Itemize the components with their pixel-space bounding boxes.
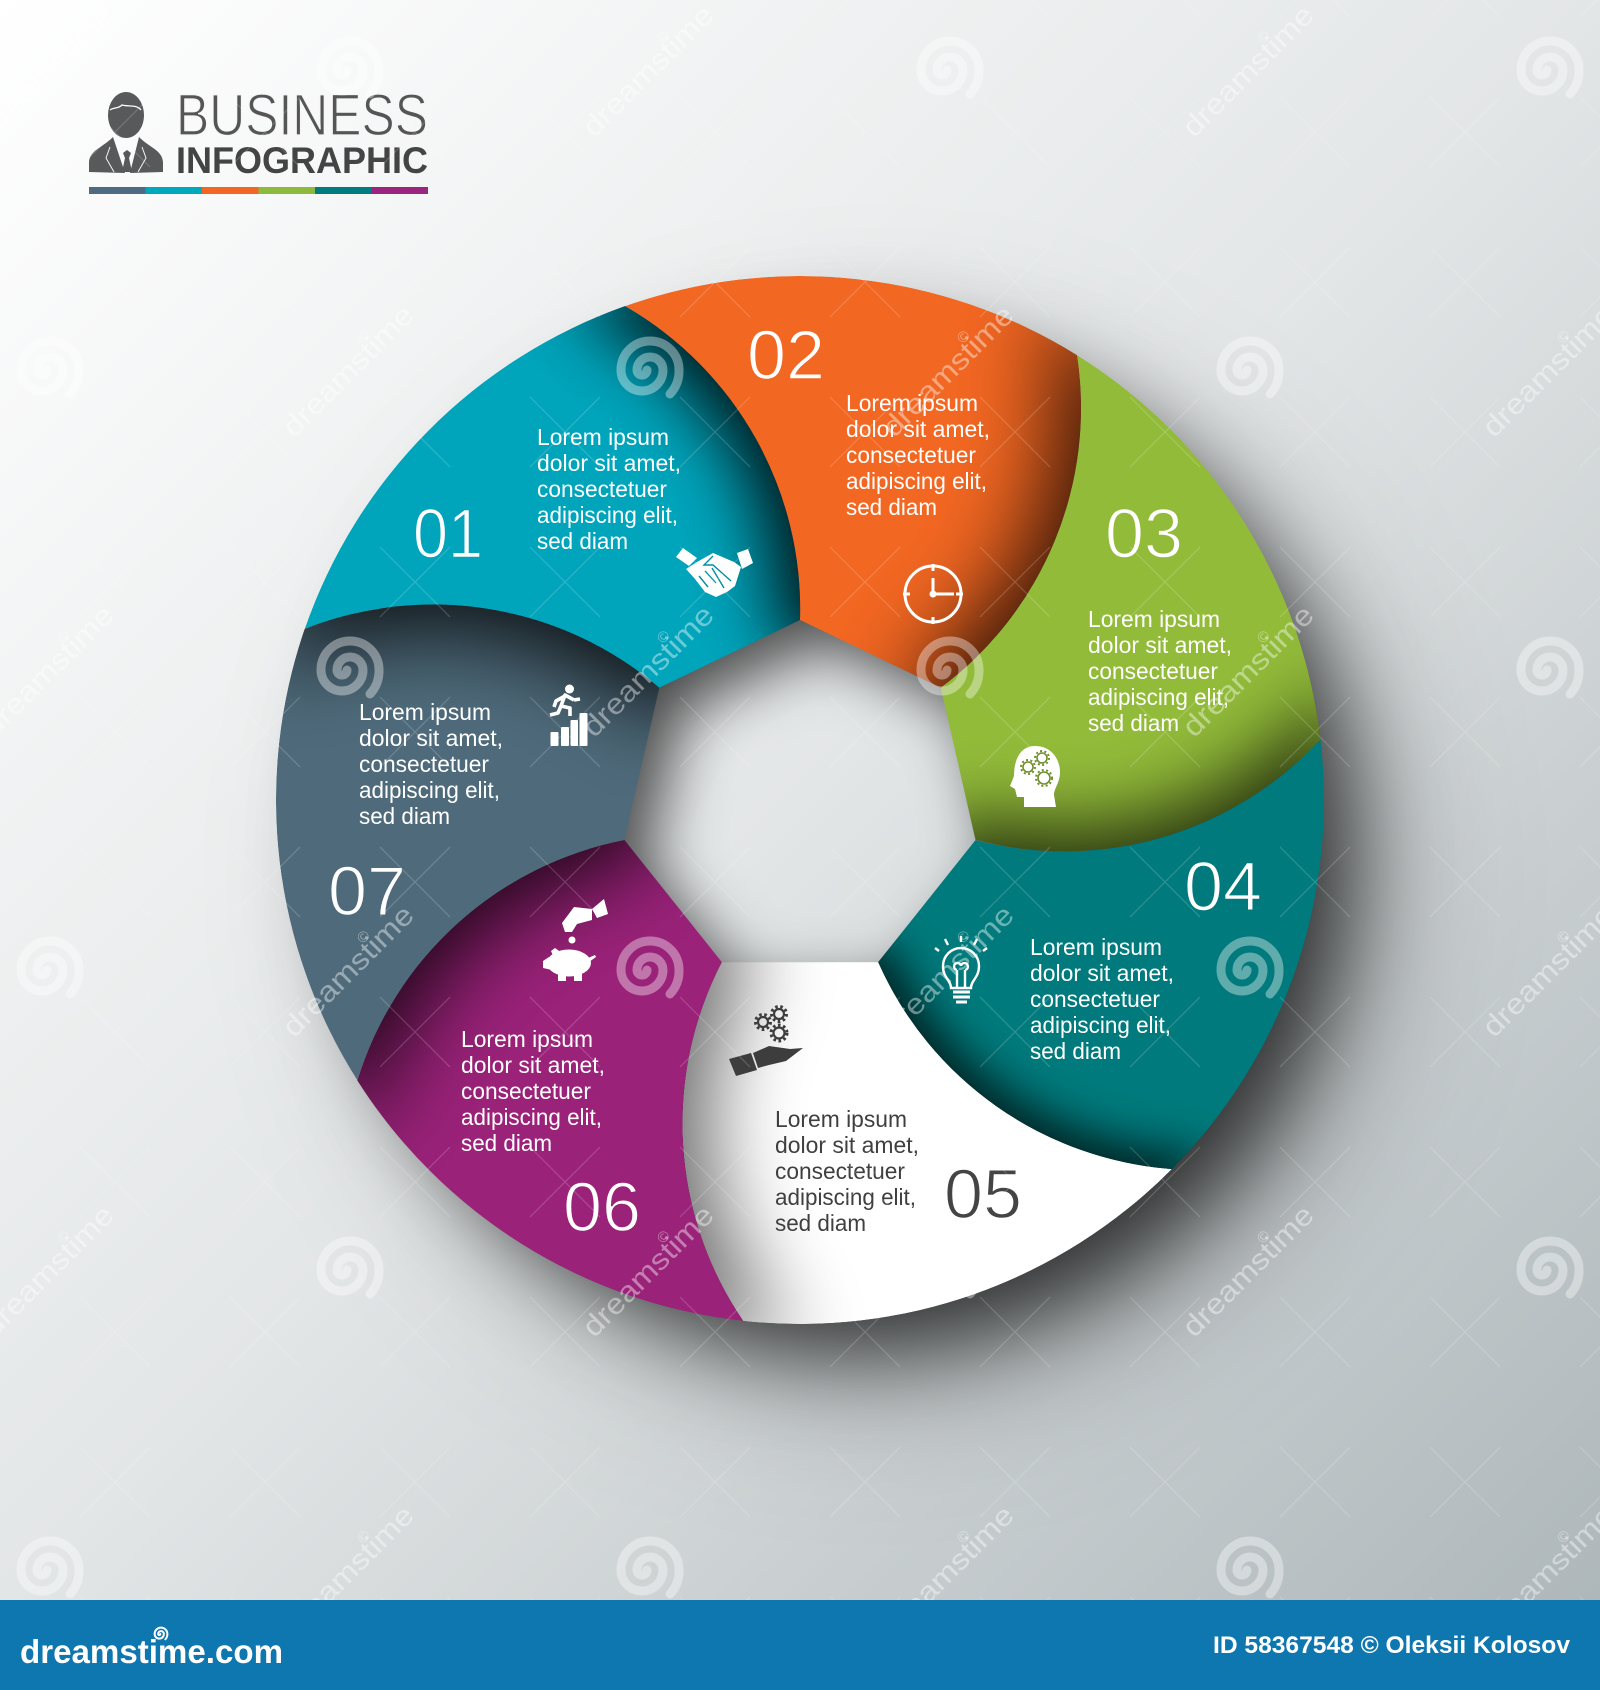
- watermark text: dreamstime: [276, 899, 421, 1044]
- watermark text: ©: [654, 1227, 674, 1247]
- watermark text: dreamstime: [1176, 599, 1321, 744]
- text block 04: sed diam: [1030, 1038, 1121, 1064]
- text block 05: sed diam: [775, 1210, 866, 1236]
- watermark text: ©: [54, 1227, 74, 1247]
- watermark text: dreamstime: [276, 299, 421, 444]
- watermark text: ©: [654, 27, 674, 47]
- text block 07: [359, 699, 503, 829]
- watermark text: ©: [954, 1527, 974, 1547]
- text block 02: dolor sit amet,: [846, 416, 990, 442]
- text block 05: adipiscing elit,: [775, 1184, 916, 1210]
- number 03: 03: [1105, 494, 1183, 572]
- icon: head with gears: [1010, 746, 1060, 807]
- icon: light bulb: [935, 936, 987, 1002]
- segment 01 shape: [305, 306, 800, 688]
- colour bar: [89, 187, 428, 194]
- watermark text: ©: [1554, 327, 1574, 347]
- watermark text: ©: [1554, 1527, 1574, 1547]
- text block 04: consectetuer: [1030, 986, 1160, 1012]
- watermark text: ©: [1554, 927, 1574, 947]
- text block 01: [537, 424, 681, 554]
- segment 03 shape: [941, 356, 1320, 852]
- watermark text: ©: [54, 27, 74, 47]
- text block 04: Lorem ipsum: [1030, 934, 1162, 960]
- watermark text: dreamstime: [876, 299, 1021, 444]
- watermark text: ©: [54, 627, 74, 647]
- watermark text: dreamstime: [276, 1499, 421, 1644]
- watermark text: ©: [1254, 27, 1274, 47]
- text block 05: consectetuer: [775, 1158, 905, 1184]
- footer logo spiral: [155, 1628, 167, 1639]
- watermark text: dreamstime: [576, 1199, 721, 1344]
- number 01: 01: [413, 494, 483, 572]
- text block 03: dolor sit amet,: [1088, 632, 1232, 658]
- icon: clock: [903, 564, 963, 624]
- watermark text: dreamstime: [876, 899, 1021, 1044]
- text block 02: consectetuer: [846, 442, 976, 468]
- text block 07: Lorem ipsum: [359, 699, 491, 725]
- watermark text: dreamstime: [576, 0, 721, 144]
- text block 05: dolor sit amet,: [775, 1132, 919, 1158]
- watermark text: ©: [354, 1527, 374, 1547]
- text block 03: consectetuer: [1088, 658, 1218, 684]
- text block 06: consectetuer: [461, 1078, 591, 1104]
- text block 06: adipiscing elit,: [461, 1104, 602, 1130]
- heading: infographic: INFOGRAPHIC: [176, 140, 428, 181]
- panel: segment 03: [941, 356, 1320, 852]
- text block 01: sed diam: [537, 528, 628, 554]
- number 04: 04: [1184, 848, 1262, 926]
- icon: handshake: [676, 548, 753, 597]
- watermark text: ©: [354, 927, 374, 947]
- footer logo text: dreamstime.com: [20, 1633, 283, 1670]
- text block 03: sed diam: [1088, 710, 1179, 736]
- text block 01: Lorem ipsum: [537, 424, 669, 450]
- text block 05: [775, 1106, 919, 1236]
- segment 07 shape: [0, 65, 986, 1144]
- logo: business infographic: [89, 83, 428, 194]
- text block 02: adipiscing elit,: [846, 468, 987, 494]
- number 05: 05: [944, 1155, 1022, 1233]
- text block 06: Lorem ipsum: [461, 1026, 593, 1052]
- footer banner: [0, 1600, 1600, 1690]
- footer credit: ID 58367548 © Oleksii Kolosov: [1213, 1632, 1571, 1659]
- watermark text: dreamstime: [1176, 1199, 1321, 1344]
- icon: hand with gears: [729, 1006, 803, 1076]
- segment 06 shape: [357, 840, 743, 1321]
- watermark text: ©: [1254, 627, 1274, 647]
- icon: runner on bars: [550, 684, 588, 746]
- text block 03: [1088, 606, 1232, 736]
- text block 07: consectetuer: [359, 751, 489, 777]
- segment 05 shape: [682, 962, 1172, 1324]
- number 07: 07: [328, 852, 406, 930]
- icon: hand and piggy bank: [543, 899, 608, 981]
- text block 07: dolor sit amet,: [359, 725, 503, 751]
- text block 01: consectetuer: [537, 476, 667, 502]
- number 06: 06: [563, 1168, 641, 1246]
- watermark text: ©: [354, 327, 374, 347]
- text block 07: adipiscing elit,: [359, 777, 500, 803]
- number 02: 02: [747, 316, 825, 394]
- panel: segment 04: [878, 740, 1324, 1170]
- watermark text: ©: [1254, 1227, 1274, 1247]
- heading: business: BUSINESS: [176, 83, 428, 148]
- segment 04 shape: [878, 740, 1324, 1170]
- text block 04: dolor sit amet,: [1030, 960, 1174, 986]
- ring drop shadow: [350, 350, 1375, 1375]
- text block 03: adipiscing elit,: [1088, 684, 1229, 710]
- text block 01: adipiscing elit,: [537, 502, 678, 528]
- watermark text: dreamstime: [876, 1499, 1021, 1644]
- text block 02: [846, 390, 990, 520]
- icon: businessman: [89, 92, 163, 173]
- panel: segment 05: [682, 962, 1172, 1324]
- watermark text: ©: [954, 927, 974, 947]
- text block 04: adipiscing elit,: [1030, 1012, 1171, 1038]
- panel: segment 02: [625, 276, 1081, 688]
- text block 06: sed diam: [461, 1130, 552, 1156]
- segment 02 shape: [625, 276, 1081, 688]
- text block 06: dolor sit amet,: [461, 1052, 605, 1078]
- text block 04: [1030, 934, 1174, 1064]
- panel: segment 06: [357, 840, 743, 1321]
- watermark text: ©: [654, 627, 674, 647]
- panel: segment 07: [0, 65, 986, 1144]
- text block 01: dolor sit amet,: [537, 450, 681, 476]
- watermark text: dreamstime: [1176, 0, 1321, 144]
- text block 05: Lorem ipsum: [775, 1106, 907, 1132]
- panel: segment 01: [305, 306, 800, 688]
- watermark text: ©: [954, 327, 974, 347]
- watermark text: dreamstime: [576, 599, 721, 744]
- text block 03: Lorem ipsum: [1088, 606, 1220, 632]
- text block 02: sed diam: [846, 494, 937, 520]
- text block 06: [461, 1026, 605, 1156]
- text block 02: Lorem ipsum: [846, 390, 978, 416]
- text block 07: sed diam: [359, 803, 450, 829]
